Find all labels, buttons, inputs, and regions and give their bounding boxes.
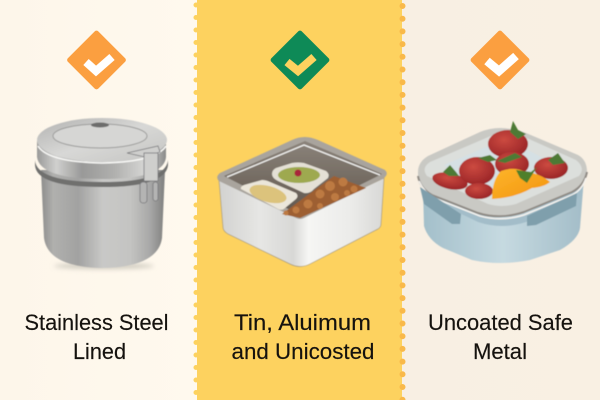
strawberries [431,130,568,199]
icon: orange diamond check right [470,30,530,90]
panel: tin and aluminium background [196,0,402,400]
label: uncoated safe metal: Uncoated Safe [428,310,573,335]
label: tin, aluimum and unicosted: Tin, Aluimum [234,310,371,335]
canister clasp [127,146,160,203]
label: stainless steel lined: Lined [73,339,126,364]
lunch box with strawberries and pepper [418,121,587,263]
metal tray with food [217,137,387,266]
lid rim [418,128,587,216]
food: small dish front [241,180,298,210]
leaves [443,121,565,176]
label: uncoated safe metal: Metal [473,339,527,364]
label: stainless steel lined [24,310,168,364]
icon: orange diamond check left [66,30,127,90]
label: tin, aluimum and unicosted: and Unicosted [232,339,374,364]
stainless steel canister [35,118,168,269]
label: stainless steel lined: Stainless Steel [24,310,168,335]
pepper [492,169,550,199]
label: uncoated safe metal [428,310,573,364]
panel: uncoated metal background [402,0,600,400]
food: meat [282,176,366,218]
food: small dish back [272,162,329,193]
label: tin, aluimum and unicosted [232,310,374,364]
icon: green diamond check centre [270,30,330,90]
panel: stainless steel background [0,0,197,400]
latches [420,187,461,224]
